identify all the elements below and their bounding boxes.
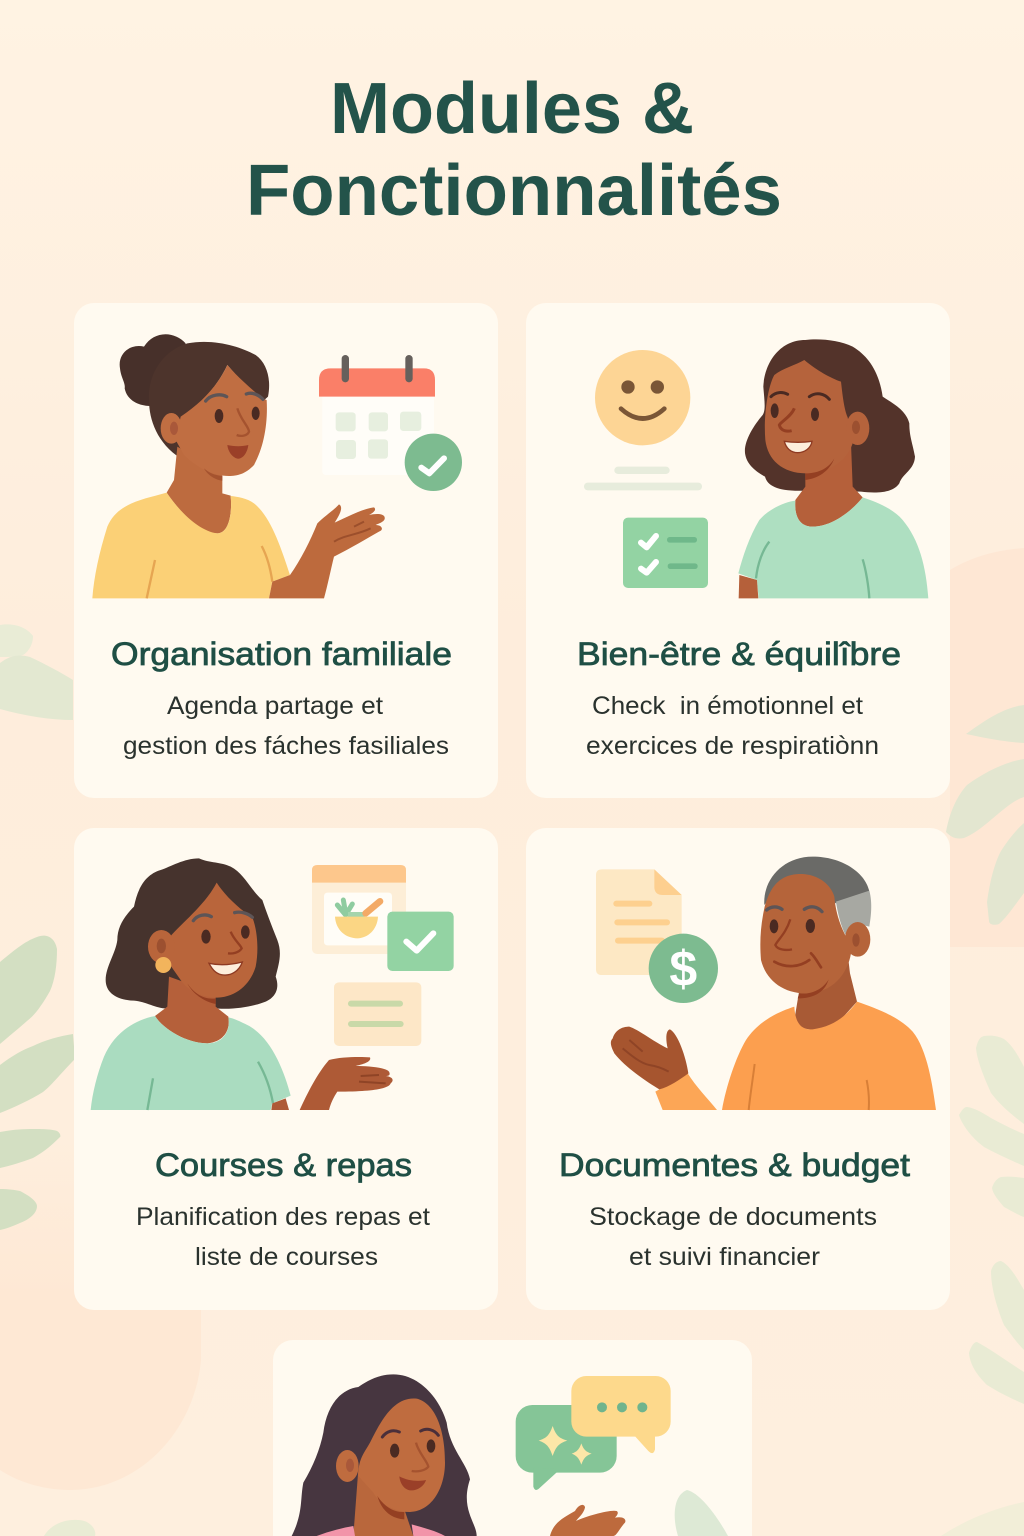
icon: document with dollar coin: $ [669, 941, 697, 997]
icon: document with dollar coin [596, 869, 718, 1003]
icon: recipe card [312, 865, 406, 954]
description [136, 1203, 430, 1271]
description: Agenda partage et [167, 692, 383, 720]
person: woman with earring and mint shirt [91, 858, 393, 1110]
description: Planification des repas et [136, 1203, 430, 1231]
card background [526, 828, 950, 1310]
decorative leaf on card [675, 1490, 728, 1536]
heading: Documentes & budget [559, 1147, 910, 1183]
icon: chat bubbles [516, 1376, 671, 1490]
hand gesture [550, 1505, 625, 1536]
icon: green checklist [623, 518, 708, 588]
description [589, 1203, 877, 1271]
heading: Bien-être & équilîbre [577, 636, 901, 672]
person: woman with bun and yellow shirt [92, 334, 385, 598]
description: exercices de respiratiònn [586, 732, 879, 760]
description: gestion des fáches fasiliales [123, 732, 449, 760]
description: Check in émotionnel et [592, 692, 863, 720]
icon: calendar with check [319, 355, 462, 491]
description [123, 692, 449, 760]
person: woman with long dark hair [292, 1374, 477, 1536]
title: Fonctionnalités [246, 151, 782, 231]
panel: bien-être et équilibre [526, 303, 950, 798]
icon: smiley with lines [584, 350, 702, 490]
description: et suivi financier [629, 1243, 820, 1271]
person: smiling woman with mint shirt [738, 339, 928, 598]
panel: documents et budget [526, 828, 950, 1310]
card background [74, 828, 498, 1310]
description: liste de courses [195, 1243, 378, 1271]
title [246, 69, 782, 231]
card background [273, 1340, 752, 1536]
panel: organisation familiale [74, 303, 498, 798]
icon: green check tile [387, 912, 454, 971]
description [586, 692, 879, 760]
card background [74, 303, 498, 798]
card background [526, 303, 950, 798]
heading: Courses & repas [155, 1147, 412, 1183]
panel: courses et repas [74, 828, 498, 1310]
description: Stockage de documents [589, 1203, 877, 1231]
panel: communication [273, 1340, 752, 1536]
person: older man in orange sweater [611, 857, 936, 1110]
icon: shopping note [334, 982, 421, 1046]
heading: Organisation familiale [111, 636, 452, 672]
title: Modules & [330, 69, 694, 149]
